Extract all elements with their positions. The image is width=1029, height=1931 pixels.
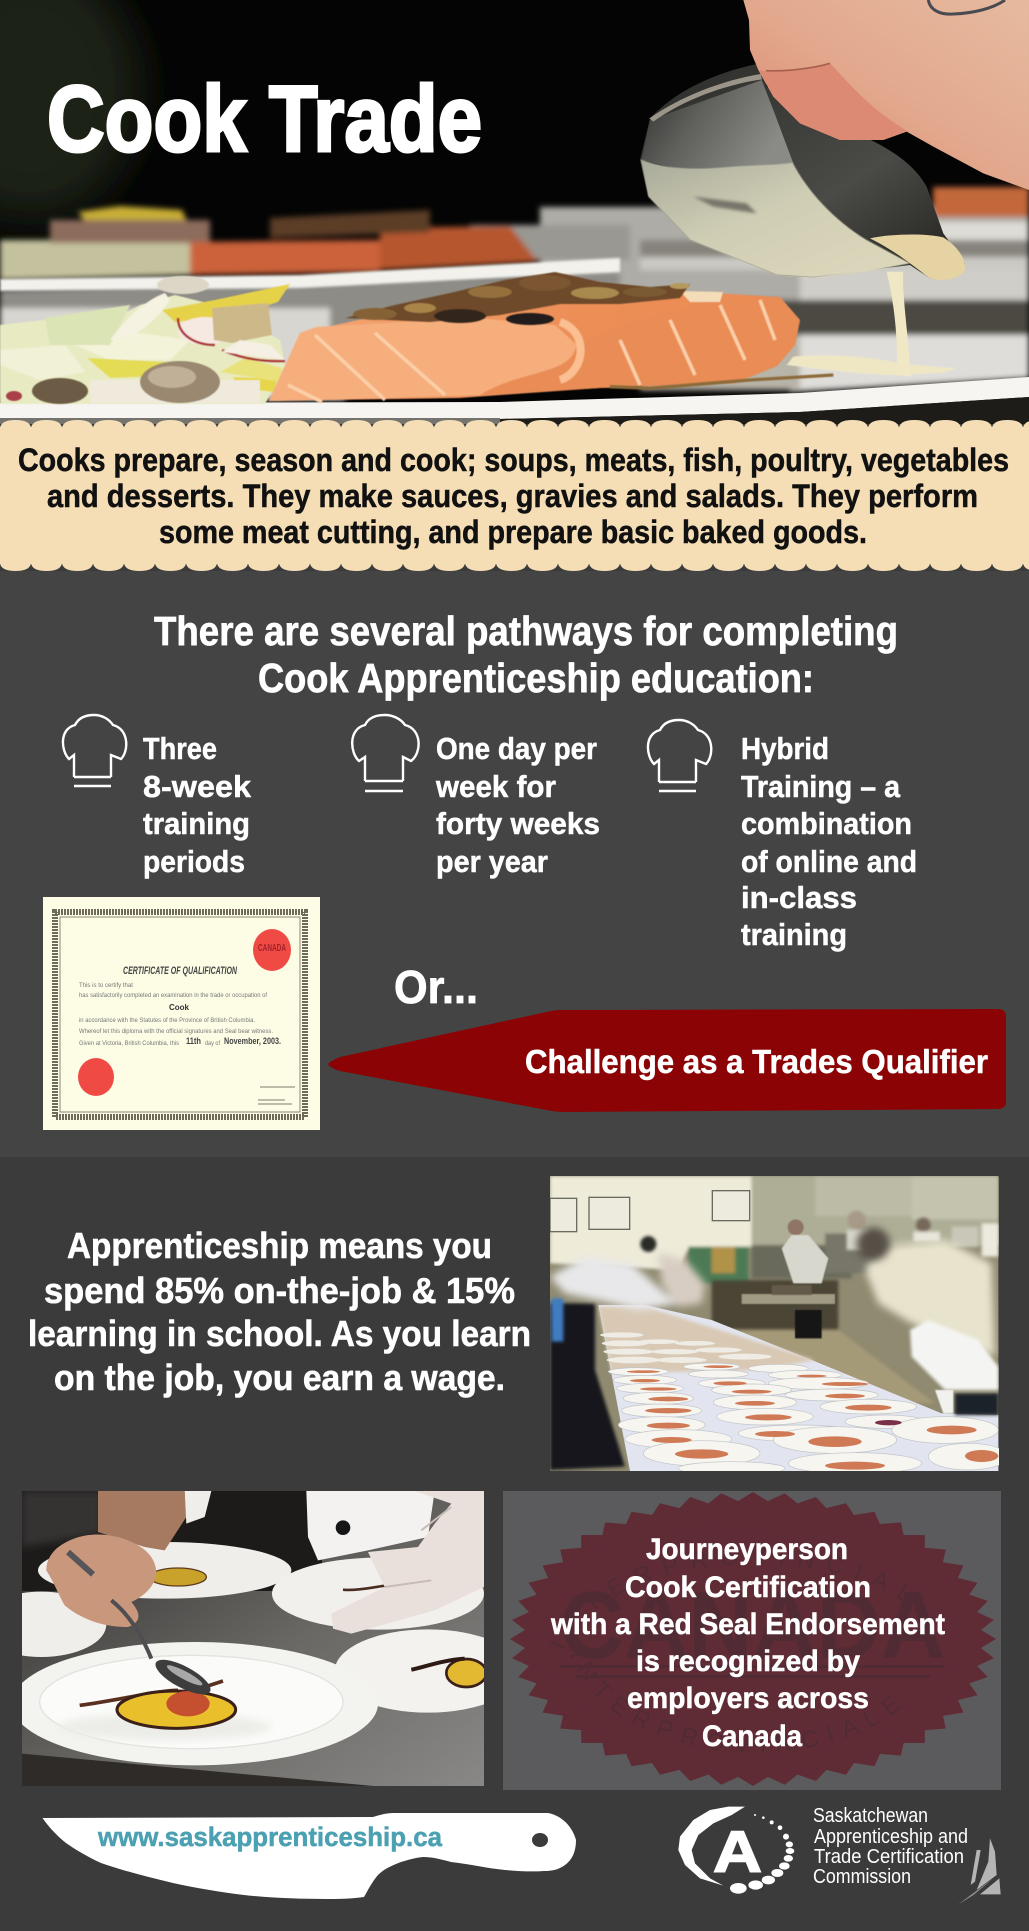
hand, ladle and sauce	[610, 0, 1029, 388]
panel: intro band	[0, 420, 1029, 571]
certificate body: This is to certify that	[79, 982, 133, 989]
certificate heading: CERTIFICATE OF QUALIFICATION	[123, 965, 238, 977]
salmon fillet	[269, 291, 800, 402]
icon: seal top	[253, 929, 291, 971]
icon: white knife with website address	[42, 1813, 576, 1899]
panel: certificate of qualification: CANADA	[258, 943, 286, 954]
photo: chef plating a dish with a spoon	[22, 1491, 484, 1786]
photo: kitchen with rows of plated dishes	[550, 1176, 1008, 1475]
lower right plate	[336, 1629, 484, 1713]
plates far rows	[600, 1332, 772, 1363]
big plate	[11, 1642, 378, 1765]
ladle dark back	[640, 63, 965, 279]
text block: apprenticeship explanation: Apprenticeship means you	[67, 1225, 492, 1266]
glove	[331, 1491, 484, 1634]
heading: pathways: There are several pathways for completing	[154, 608, 898, 654]
commission name	[813, 1805, 968, 1888]
mushrooms	[6, 361, 260, 404]
or label: Or...	[394, 961, 478, 1013]
knife handle hole	[532, 1833, 548, 1847]
upper centre plate	[38, 1542, 291, 1599]
pathway 2 text: per year	[436, 844, 548, 879]
arm	[98, 1491, 186, 1550]
certificate body: Given at Victoria, British Columbia, this	[79, 1040, 180, 1047]
pathway 1 text	[143, 731, 252, 879]
icon: seal bottom	[78, 1058, 114, 1096]
pathway 3 text	[741, 731, 917, 952]
salad	[0, 276, 290, 404]
icon: chef hat 2	[352, 715, 419, 791]
pathway 3 text: training	[741, 917, 847, 952]
pathway 1 text: training	[143, 806, 250, 841]
intro text: some meat cutting, and prepare basic baked goods.	[159, 514, 867, 550]
piping sleeve and bag	[910, 1320, 998, 1415]
seal burst	[510, 1492, 996, 1786]
food on plates	[627, 1365, 998, 1470]
pathway 1 text: 8-week	[143, 769, 252, 804]
pathway 2 text: One day per	[436, 731, 597, 766]
text block: apprenticeship explanation	[28, 1225, 531, 1398]
certificate body: has satisfactorily completed an examination in the trade or occupation of	[79, 992, 267, 999]
text block: apprenticeship explanation: on the job, you earn a wage.	[54, 1357, 505, 1398]
ladle rim	[649, 74, 762, 122]
heading: pathways: Cook Apprenticeship education:	[258, 655, 814, 701]
section divider band	[0, 1157, 1029, 1931]
faint seal lettering: INTERPROVINCIAL	[550, 1548, 907, 1650]
panel: pathways section background	[0, 571, 1029, 1157]
background chefs	[847, 1211, 998, 1257]
faint seal lettering: INTERPROVINCIALE	[570, 1654, 901, 1752]
background plate rim	[0, 258, 620, 291]
commission name: Saskatchewan	[813, 1805, 928, 1827]
seal text: is recognized by	[636, 1645, 860, 1678]
right chef head	[857, 1227, 890, 1261]
left plate	[22, 1592, 106, 1657]
main plate rim	[0, 377, 1029, 424]
pathway 3 text: in-class	[741, 880, 857, 915]
sauce spout	[870, 234, 965, 280]
logo: apprenticeship commission	[678, 1805, 1001, 1904]
intro text	[18, 442, 1009, 550]
hand	[46, 1534, 156, 1627]
spoon	[68, 1552, 93, 1574]
crust topping	[345, 272, 690, 325]
website url: www.saskapprenticeship.ca	[97, 1822, 443, 1852]
pathway 2 text	[435, 731, 600, 879]
chef jacket	[306, 1491, 435, 1560]
ladle metal bowl	[642, 80, 793, 170]
logo ring and dots	[678, 1807, 794, 1894]
commission name: Commission	[813, 1866, 911, 1888]
logo letter: A	[713, 1820, 762, 1885]
pathway 1 text: periods	[143, 844, 245, 879]
commission name: Trade Certification	[814, 1846, 964, 1868]
sauce drip on plate	[787, 355, 957, 375]
blurred background plates	[0, 187, 1029, 400]
hand	[743, 0, 1029, 190]
sauce garnish	[80, 1681, 223, 1705]
pathway 2 text: week for	[435, 769, 556, 804]
seal text: employers across	[627, 1682, 869, 1715]
pathway 3 text: Hybrid	[741, 731, 829, 766]
plates near rows	[608, 1363, 1008, 1475]
text block: apprenticeship explanation: learning in school. As you learn	[28, 1313, 531, 1354]
seal text: with a Red Seal Endorsement	[550, 1608, 945, 1641]
arrow: challenge as a trades qualifier	[328, 1009, 1006, 1112]
left chef head	[640, 1236, 656, 1252]
panel: certificate of qualification	[43, 897, 320, 1130]
icon: chef hat 3	[648, 720, 711, 791]
upper right plate	[272, 1558, 484, 1630]
faint seal lettering: CANADA	[560, 1572, 945, 1679]
plate table	[598, 1305, 998, 1471]
certificate body: 11th	[186, 1036, 201, 1046]
certificate body: day of	[205, 1040, 220, 1047]
pathway 3 text: of online and	[741, 844, 917, 879]
pathway 3 text: combination	[741, 806, 912, 841]
pathway 3 text: Training – a	[741, 769, 901, 804]
seal text: Cook Certification	[625, 1571, 871, 1604]
faint seal lettering	[550, 1548, 945, 1752]
seal text	[550, 1533, 945, 1753]
commission name: Apprenticeship and	[814, 1826, 968, 1848]
standing chef	[742, 1219, 835, 1338]
blurred chefs foreground	[550, 1240, 995, 1357]
wall signs	[550, 1191, 750, 1232]
left dark figure	[550, 1303, 625, 1470]
text block: apprenticeship explanation: spend 85% on-the-job & 15%	[44, 1270, 515, 1311]
panel: hero photo of sauce poured on salmon	[0, 0, 1029, 424]
certificate body: in accordance with the Statutes of the Province of British Columbia.	[79, 1017, 255, 1024]
heading: pathways	[154, 608, 898, 701]
icon: sail mark	[958, 1838, 1001, 1904]
signature marks	[258, 1087, 295, 1104]
seal text: Canada	[702, 1720, 802, 1753]
seal text: Journeyperson	[646, 1533, 848, 1566]
certificate body	[79, 982, 281, 1047]
certificate body: Cook	[169, 1003, 190, 1012]
back wall	[550, 1176, 998, 1403]
pathway 1 text: Three	[143, 731, 217, 766]
certificate body: Whereof let this diploma with the official signatures and Seal bear witness.	[79, 1028, 273, 1035]
pathway 2 text: forty weeks	[436, 806, 600, 841]
sauce stream	[887, 272, 911, 377]
panel: red seal certification	[503, 1491, 1001, 1790]
title: Cook Trade	[47, 66, 482, 171]
arrow label: Challenge as a Trades Qualifier	[525, 1043, 988, 1080]
certificate body: November, 2003.	[224, 1036, 281, 1046]
sauce on bowl	[641, 159, 910, 277]
icon: chef hat 1	[63, 715, 126, 786]
